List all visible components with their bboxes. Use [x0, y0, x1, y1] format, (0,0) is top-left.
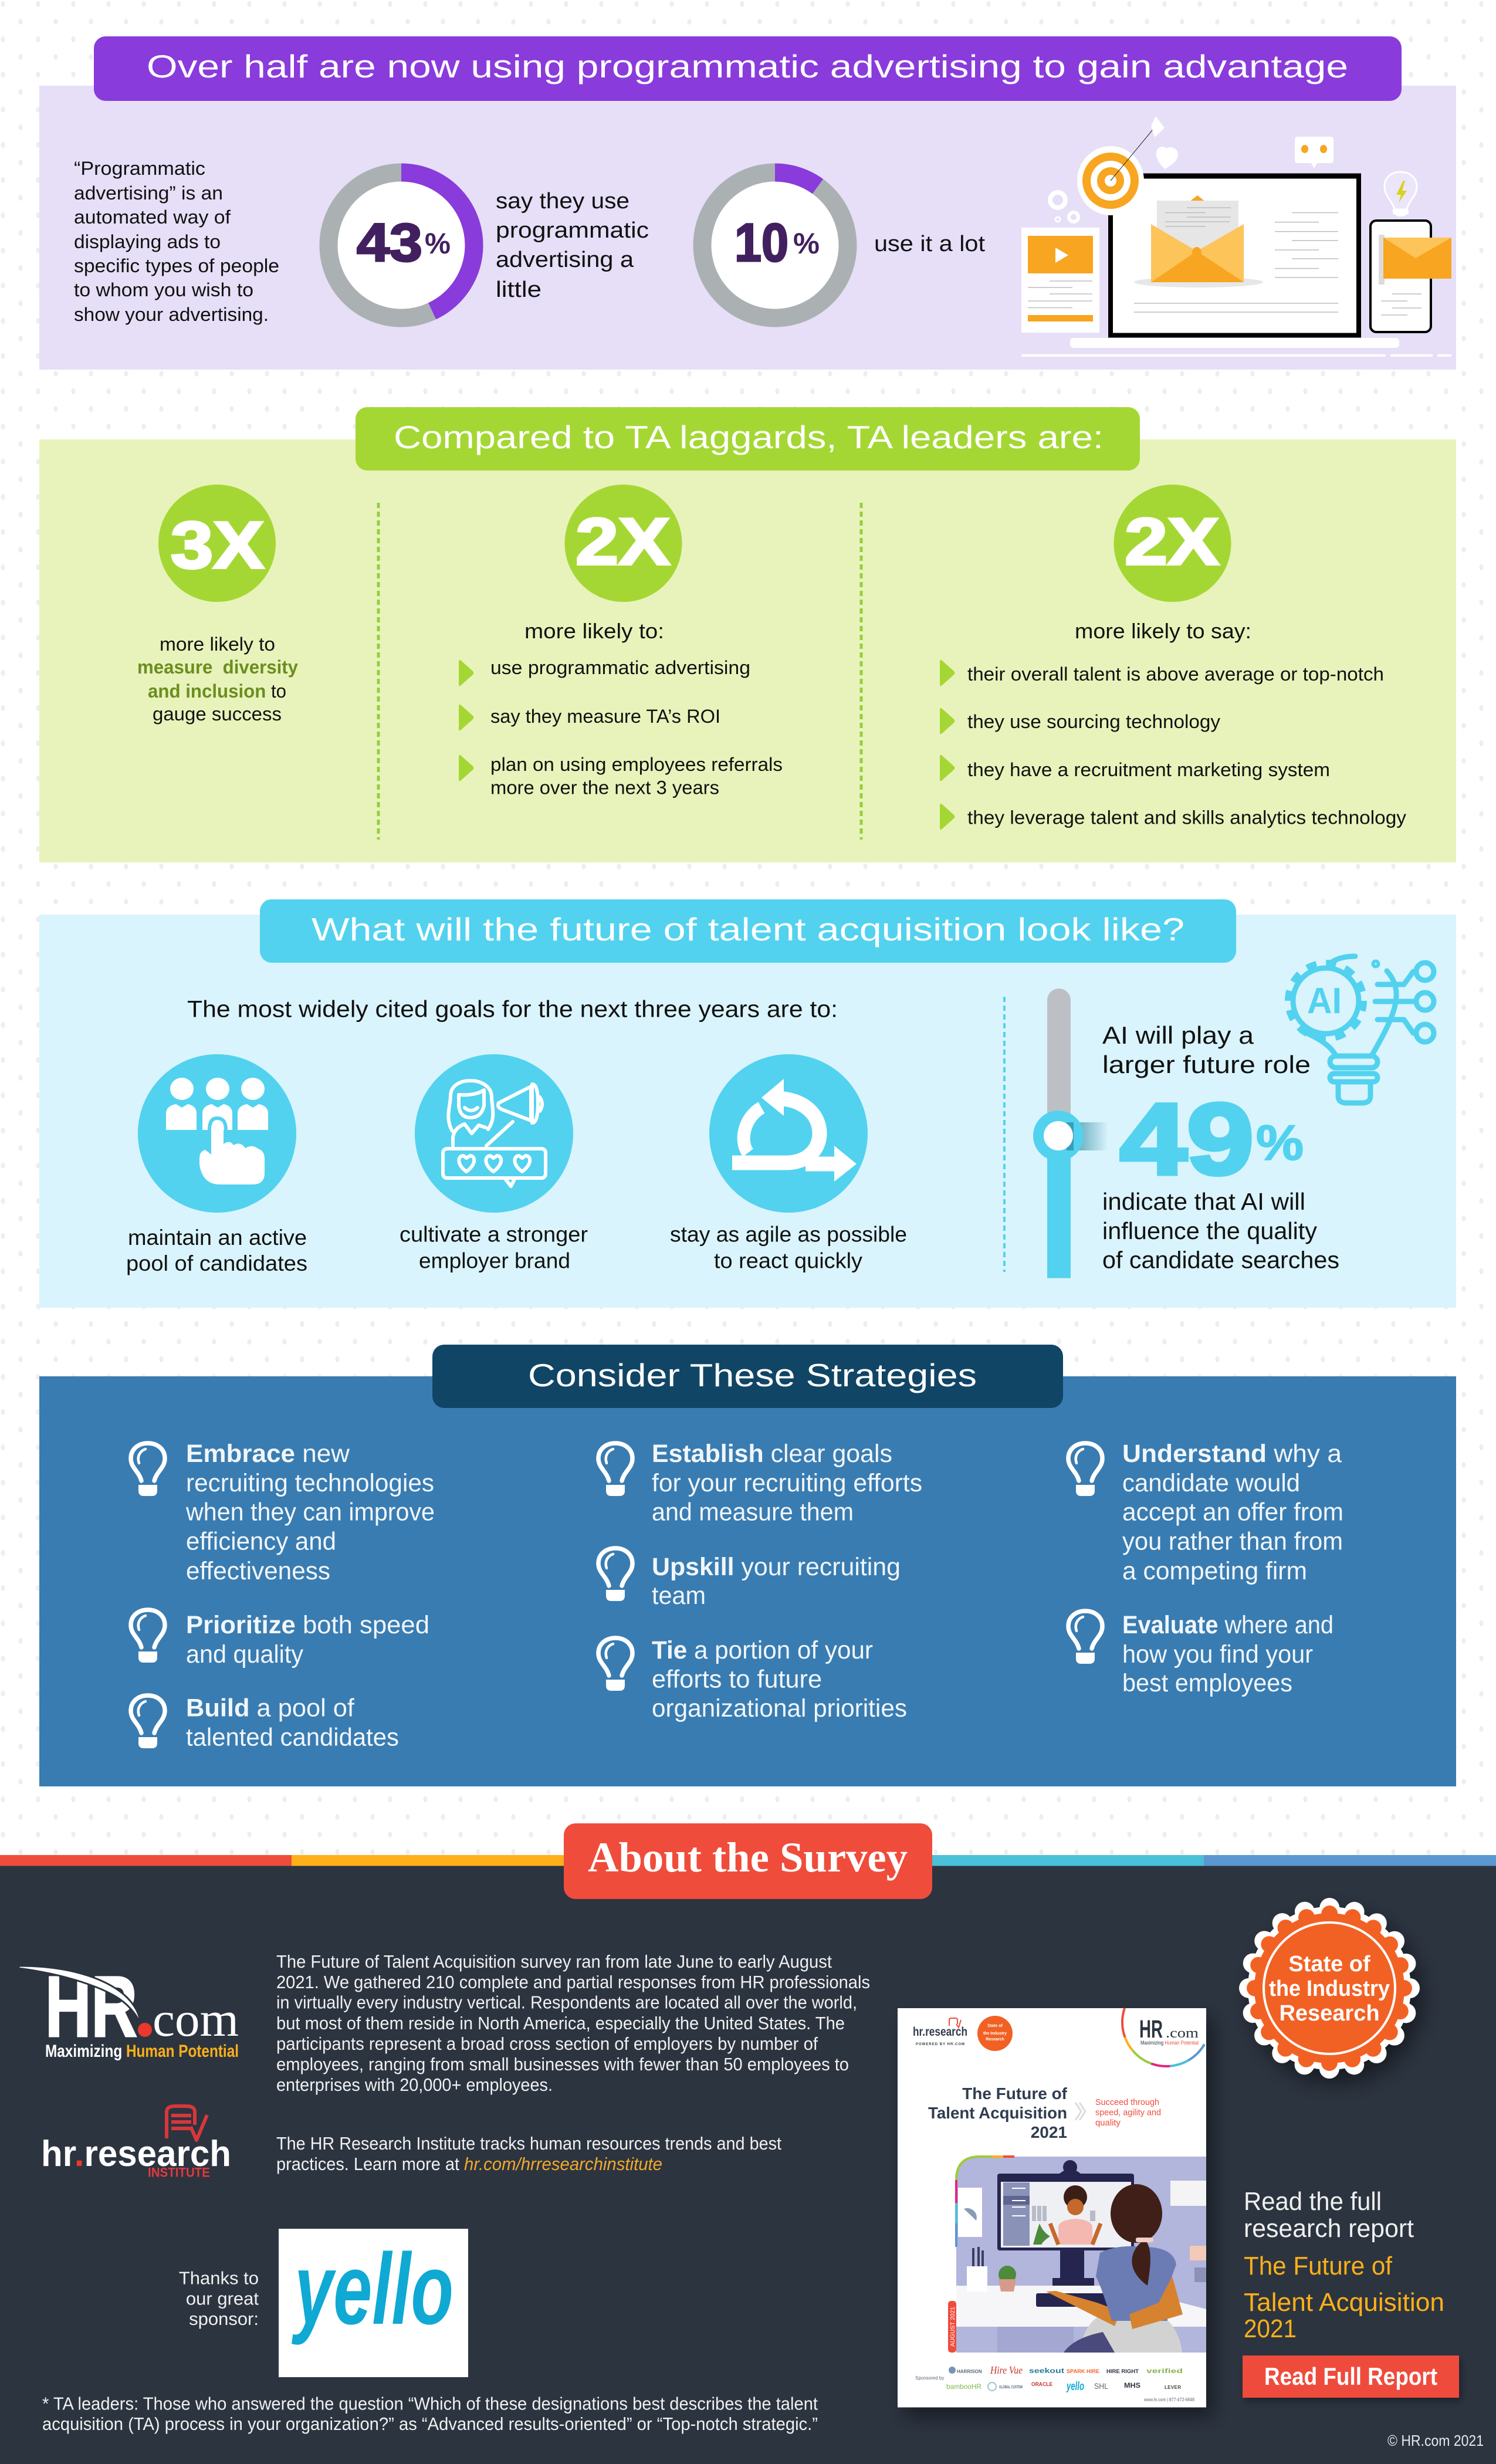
cover subtitle: quality [1095, 2118, 1121, 2128]
logo: HR Research Institute: hr.research [41, 2134, 231, 2174]
text: 3X description: more likely to [160, 634, 275, 655]
text: survey description: enterprises with 20,000+ employees. [276, 2074, 553, 2095]
cover sponsors: MHS [1124, 2381, 1140, 2389]
strategy: build: talented candidates [186, 1724, 399, 1752]
strategy: evaluate: best employees [1122, 1669, 1292, 1697]
strategy: tie: Tie a portion of your [652, 1636, 873, 1664]
strategy: tie: efforts to future [652, 1666, 822, 1694]
cover badge: the Industry [983, 2032, 1007, 2036]
list: more likely to: more likely to: [524, 619, 664, 643]
text: read the full report: Talent Acquisition [1244, 2288, 1444, 2317]
cover sponsors: HIRE RIGHT [1106, 2368, 1139, 2374]
donut chart: 43%: 43 [357, 213, 422, 273]
icon: AI light bulb [1289, 956, 1434, 1103]
heading: future of TA [260, 899, 1236, 963]
caption: pool of candidates [126, 1226, 307, 1275]
button: read full report [1243, 2355, 1459, 2398]
logo: yello [279, 2229, 468, 2377]
strategy: build: Build a pool of [186, 1694, 355, 1722]
text: survey description: participants represent a broad cross section of employers by number of [276, 2033, 818, 2054]
text: survey description [276, 1951, 870, 2095]
logo: HR.com: com [153, 1992, 239, 2047]
text: HR Research Institute description: practices. Learn more at [276, 2154, 459, 2174]
text: 3X description: measure diversity [137, 656, 298, 678]
badge: state of the industry research [1248, 1907, 1411, 2070]
logo: yello: yello [291, 2233, 453, 2345]
icon: heart [1156, 147, 1178, 169]
icon: employer brand [415, 1054, 573, 1213]
cover sponsors: Sponsored by [915, 2375, 944, 2381]
text: sponsor thanks: sponsor: [189, 2309, 259, 2329]
heading: programmatic advertising [94, 36, 1402, 101]
logo: HR Research Institute [41, 2106, 231, 2180]
donut chart: 10%: 10 [735, 213, 788, 273]
text: read the full report: Read the full [1244, 2187, 1382, 2216]
text: HR Research Institute description: The HR Research Institute tracks human resources trends and best [276, 2133, 781, 2154]
strategy: understand: candidate would [1122, 1469, 1300, 1497]
icon: AI light bulb: AI [1307, 981, 1342, 1021]
logo: HR.com: HR [45, 1959, 137, 2055]
badge: 2X middle [564, 485, 682, 602]
icon: chat bubble [1295, 137, 1333, 168]
icon: gears [1050, 192, 1078, 222]
cover illustration: video interview [948, 2157, 1206, 2353]
list: more likely to [459, 619, 783, 798]
caption: pool of candidates: maintain an active [128, 1226, 307, 1250]
strategy: upskill [598, 1548, 901, 1610]
strategy: prioritize: Prioritize both speed [186, 1611, 429, 1639]
logo: HR.com [19, 1959, 239, 2061]
list: more likely to say: they have a recruitment marketing system [967, 759, 1330, 780]
strategy: understand: Understand why a [1122, 1440, 1342, 1468]
heading: TA leaders: Compared to TA laggards, TA leaders are: [394, 419, 1104, 455]
logo: HR Research Institute: INSTITUTE [148, 2165, 210, 2180]
panel: programmatic advertising [39, 36, 1456, 370]
heading: strategies: Consider These Strategies [528, 1357, 977, 1393]
report cover [898, 2008, 1206, 2408]
cover sponsors: bambooHR [946, 2382, 981, 2391]
text: survey description: but most of them reside in North America, especially the United States. The [276, 2013, 845, 2033]
caption: stay agile: to react quickly [714, 1249, 863, 1273]
caption: stay agile [670, 1223, 907, 1273]
cover sponsors: seekout [1029, 2367, 1064, 2375]
dotted page background [0, 0, 1496, 1857]
strategy: understand: accept an offer from [1122, 1498, 1343, 1527]
strategy: establish: for your recruiting efforts [652, 1469, 922, 1497]
strategy: understand: you rather than from [1122, 1528, 1343, 1556]
cover chevrons [1075, 2103, 1085, 2120]
donut chart: 10%: % [793, 227, 820, 260]
cover title: The Future of [962, 2084, 1068, 2103]
cover sponsors: yello [1066, 2380, 1084, 2393]
text: 43% description: programmatic [496, 218, 649, 243]
statistic: 49% [1120, 1083, 1304, 1196]
text: goals intro: The most widely cited goals for the next three years are to: [187, 997, 838, 1023]
text: AI larger role: AI will play a [1102, 1021, 1254, 1049]
strategy: upskill: Upskill your recruiting [652, 1553, 901, 1581]
strategy: evaluate: Evaluate where and [1122, 1611, 1333, 1639]
icon: phone with envelope [1370, 221, 1451, 332]
cover logo: HR.com with arc: HR [1139, 2015, 1163, 2043]
text: 3X description: and inclusion to [148, 681, 286, 702]
heading: future of TA: What will the future of talent acquisition look like? [312, 911, 1184, 947]
list: more likely to say [940, 619, 1406, 830]
heading: strategies [432, 1345, 1063, 1408]
heading: programmatic advertising: Over half are now using programmatic advertising to gain advantage [147, 48, 1348, 84]
icon: target with arrow [1077, 116, 1165, 215]
cover sponsors: HARRISON [957, 2369, 982, 2374]
strategy: embrace: recruiting technologies [186, 1469, 434, 1497]
cover logo: hr research: POWERED BY HR.COM [916, 2043, 964, 2046]
text: programmatic definition [74, 158, 279, 325]
cover sponsors [915, 2364, 1194, 2402]
strategy: prioritize [131, 1610, 429, 1668]
strategy: establish: and measure them [652, 1498, 854, 1527]
icon: open envelope [1134, 195, 1263, 287]
footer: about the survey [0, 1823, 1496, 2464]
heading: about the survey [564, 1823, 932, 1899]
panel: TA leaders compared to laggards [39, 407, 1456, 862]
copyright: © HR.com 2021 [1387, 2432, 1484, 2449]
cover badge [977, 2016, 1013, 2051]
text: survey description: in virtually every industry vertical. Respondents are located all over the world, [276, 1992, 857, 2012]
list: more likely to say: their overall talent is above average or top-notch [967, 664, 1384, 685]
strategy: understand: a competing firm [1122, 1557, 1307, 1585]
text: 49% description: of candidate searches [1102, 1247, 1339, 1274]
strategy: embrace: effectiveness [186, 1557, 330, 1585]
panel: future of talent acquisition [39, 899, 1456, 1308]
cover badge: Research [986, 2037, 1004, 2042]
button: read full report: Read Full Report [1264, 2363, 1437, 2390]
cover title [928, 2084, 1068, 2141]
text: survey description: employees, ranging from small businesses with fewer than 50 employees to [276, 2054, 849, 2074]
text: 10% description: use it a lot [874, 232, 985, 256]
text: 43% description [496, 189, 649, 302]
cover sponsors: LEVER [1165, 2385, 1181, 2390]
logo: HR.com: Maximizing Human Potential [45, 2042, 239, 2061]
footnote [42, 2394, 818, 2434]
donut chart: 43%: % [425, 227, 451, 260]
cover sponsors: ORACLE [1031, 2381, 1052, 2387]
donut chart: 43% [329, 172, 474, 318]
text: read the full report: research report [1244, 2214, 1414, 2243]
text: 3X description: gauge success [153, 703, 282, 725]
footnote: acquisition (TA) process in your organization?” as “Advanced results-oriented” or “Top-notch strategic.” [42, 2414, 818, 2434]
text: programmatic definition: automated way of [74, 207, 231, 228]
text: sponsor thanks [179, 2268, 259, 2329]
heading: about the survey: About the Survey [588, 1834, 908, 1881]
text: survey description: The Future of Talent Acquisition survey ran from late June to early August [276, 1951, 832, 1972]
cover sponsors: verified [1146, 2368, 1183, 2375]
strategy: understand [1068, 1440, 1343, 1585]
cover sponsors: SPARK HIRE [1067, 2368, 1099, 2374]
strategy: embrace: efficiency and [186, 1528, 336, 1556]
list: more likely to say: they leverage talent and skills analytics technology [967, 807, 1406, 828]
strategy: tie: organizational priorities [652, 1694, 907, 1722]
text: read the full report: The Future of [1244, 2252, 1393, 2280]
text: programmatic definition: to whom you wish to [74, 279, 253, 300]
list: more likely to: plan on using employees referrals [490, 754, 783, 775]
footnote: * TA leaders: Those who answered the question “Which of these designations best describes the talent [42, 2394, 818, 2414]
cover badge: State of [987, 2024, 1003, 2028]
cover logo: hr research: hr.research [913, 2025, 967, 2039]
text: programmatic definition: show your advertising. [74, 304, 269, 325]
slider graphic [1033, 989, 1108, 1278]
list: more likely to say: more likely to say: [1075, 619, 1251, 643]
strategy: evaluate: how you find your [1122, 1640, 1313, 1668]
lines: screen copy [1134, 212, 1338, 312]
cover sponsors: SHL [1094, 2381, 1108, 2391]
list: more likely to say: they use sourcing technology [967, 711, 1220, 732]
badge: state of the industry research: State of [1288, 1952, 1370, 1976]
icon: agile loop arrows [709, 1054, 868, 1213]
text: 49% description [1102, 1188, 1339, 1274]
text: HR Research Institute description [276, 2133, 781, 2174]
list: more likely to: more over the next 3 years [490, 777, 719, 798]
caption: employer brand: cultivate a stronger [400, 1223, 588, 1246]
badge: 2X middle: 2X [576, 505, 670, 578]
cover subtitle [1095, 2097, 1161, 2128]
strategy: prioritize: and quality [186, 1640, 303, 1668]
text: 49% description: influence the quality [1102, 1217, 1317, 1244]
donut chart: 10% [702, 172, 848, 318]
badge: 3X: 3X [171, 508, 264, 582]
cover subtitle: speed, agility and [1095, 2107, 1161, 2118]
cover logo: hr research [913, 2018, 967, 2046]
illustration: email marketing on devices [1021, 116, 1451, 357]
text: programmatic definition: displaying ads to [74, 231, 221, 252]
icon: light bulb with bolt [1385, 172, 1417, 216]
heading: TA leaders [356, 407, 1140, 471]
statistic: 49%: 49 [1120, 1083, 1254, 1196]
text: 49% description: indicate that AI will [1102, 1188, 1305, 1215]
cover sponsors: Hire Vue [990, 2364, 1023, 2376]
strategy: upskill: team [652, 1582, 706, 1610]
strategy: establish: Establish clear goals [652, 1440, 892, 1468]
cover logo: HR.com with arc: Maximizing Human Potential [1140, 2040, 1199, 2046]
text: AI larger role [1102, 1021, 1311, 1078]
text: HR Research Institute description: hr.com/hrresearchinstitute [464, 2154, 662, 2174]
cover illustration: video interview: AUGUST 2021 [950, 2307, 956, 2347]
cover subtitle: Succeed through [1095, 2097, 1159, 2107]
cover sponsors: www.hr.com | 877-472-6648 [1143, 2397, 1194, 2402]
caption: stay agile: stay as agile as possible [670, 1223, 907, 1246]
text: read the full report [1244, 2187, 1444, 2343]
strategy: evaluate [1068, 1611, 1333, 1697]
cover logo: HR.com with arc [1122, 2008, 1204, 2066]
panel: consider these strategies [39, 1345, 1456, 1786]
text: programmatic definition: specific types of people [74, 255, 279, 276]
text: read the full report: 2021 [1244, 2314, 1297, 2343]
badge: state of the industry research: Research [1279, 2001, 1380, 2026]
text: survey description: 2021. We gathered 210 complete and partial responses from HR professionals [276, 1972, 870, 1992]
strategy: embrace: when they can improve [185, 1498, 435, 1527]
cover title: 2021 [1031, 2123, 1067, 2141]
strategy: tie [598, 1636, 907, 1722]
cover logo: HR.com with arc: .com [1166, 2026, 1199, 2041]
list: more likely to: say they measure TA’s ROI [490, 706, 720, 727]
badge: 2X right [1113, 485, 1231, 602]
text: 3X description [137, 634, 298, 725]
card: video ad [1021, 228, 1099, 333]
text: 43% description: little [496, 277, 541, 302]
text: 43% description: say they use [496, 189, 629, 214]
text: 43% description: advertising a [496, 248, 634, 272]
text: programmatic definition: advertising” is an [74, 182, 223, 204]
cover title: Talent Acquisition [928, 2104, 1067, 2122]
text: sponsor thanks: Thanks to [179, 2268, 259, 2288]
text: sponsor thanks: our great [186, 2289, 259, 2309]
caption: employer brand: employer brand [419, 1249, 570, 1273]
icon: pool of candidates [138, 1054, 296, 1213]
cover sponsors: GLOBAL CUSTOM [999, 2385, 1023, 2389]
strategy: establish [598, 1440, 922, 1527]
text: AI larger role: larger future role [1102, 1051, 1311, 1078]
strategy: embrace [131, 1440, 435, 1585]
caption: employer brand [400, 1223, 588, 1273]
badge: state of the industry research: the Industry [1269, 1976, 1390, 2001]
list: more likely to: use programmatic advertising [490, 657, 750, 678]
strategy: embrace: Embrace new [186, 1440, 350, 1468]
text: programmatic definition: “Programmatic [74, 158, 205, 179]
statistic: 49%: % [1256, 1115, 1304, 1170]
caption: pool of candidates: pool of candidates [126, 1251, 307, 1275]
badge: 3X [158, 485, 276, 602]
badge: 2X right: 2X [1125, 505, 1219, 578]
strategy: build [131, 1694, 399, 1752]
